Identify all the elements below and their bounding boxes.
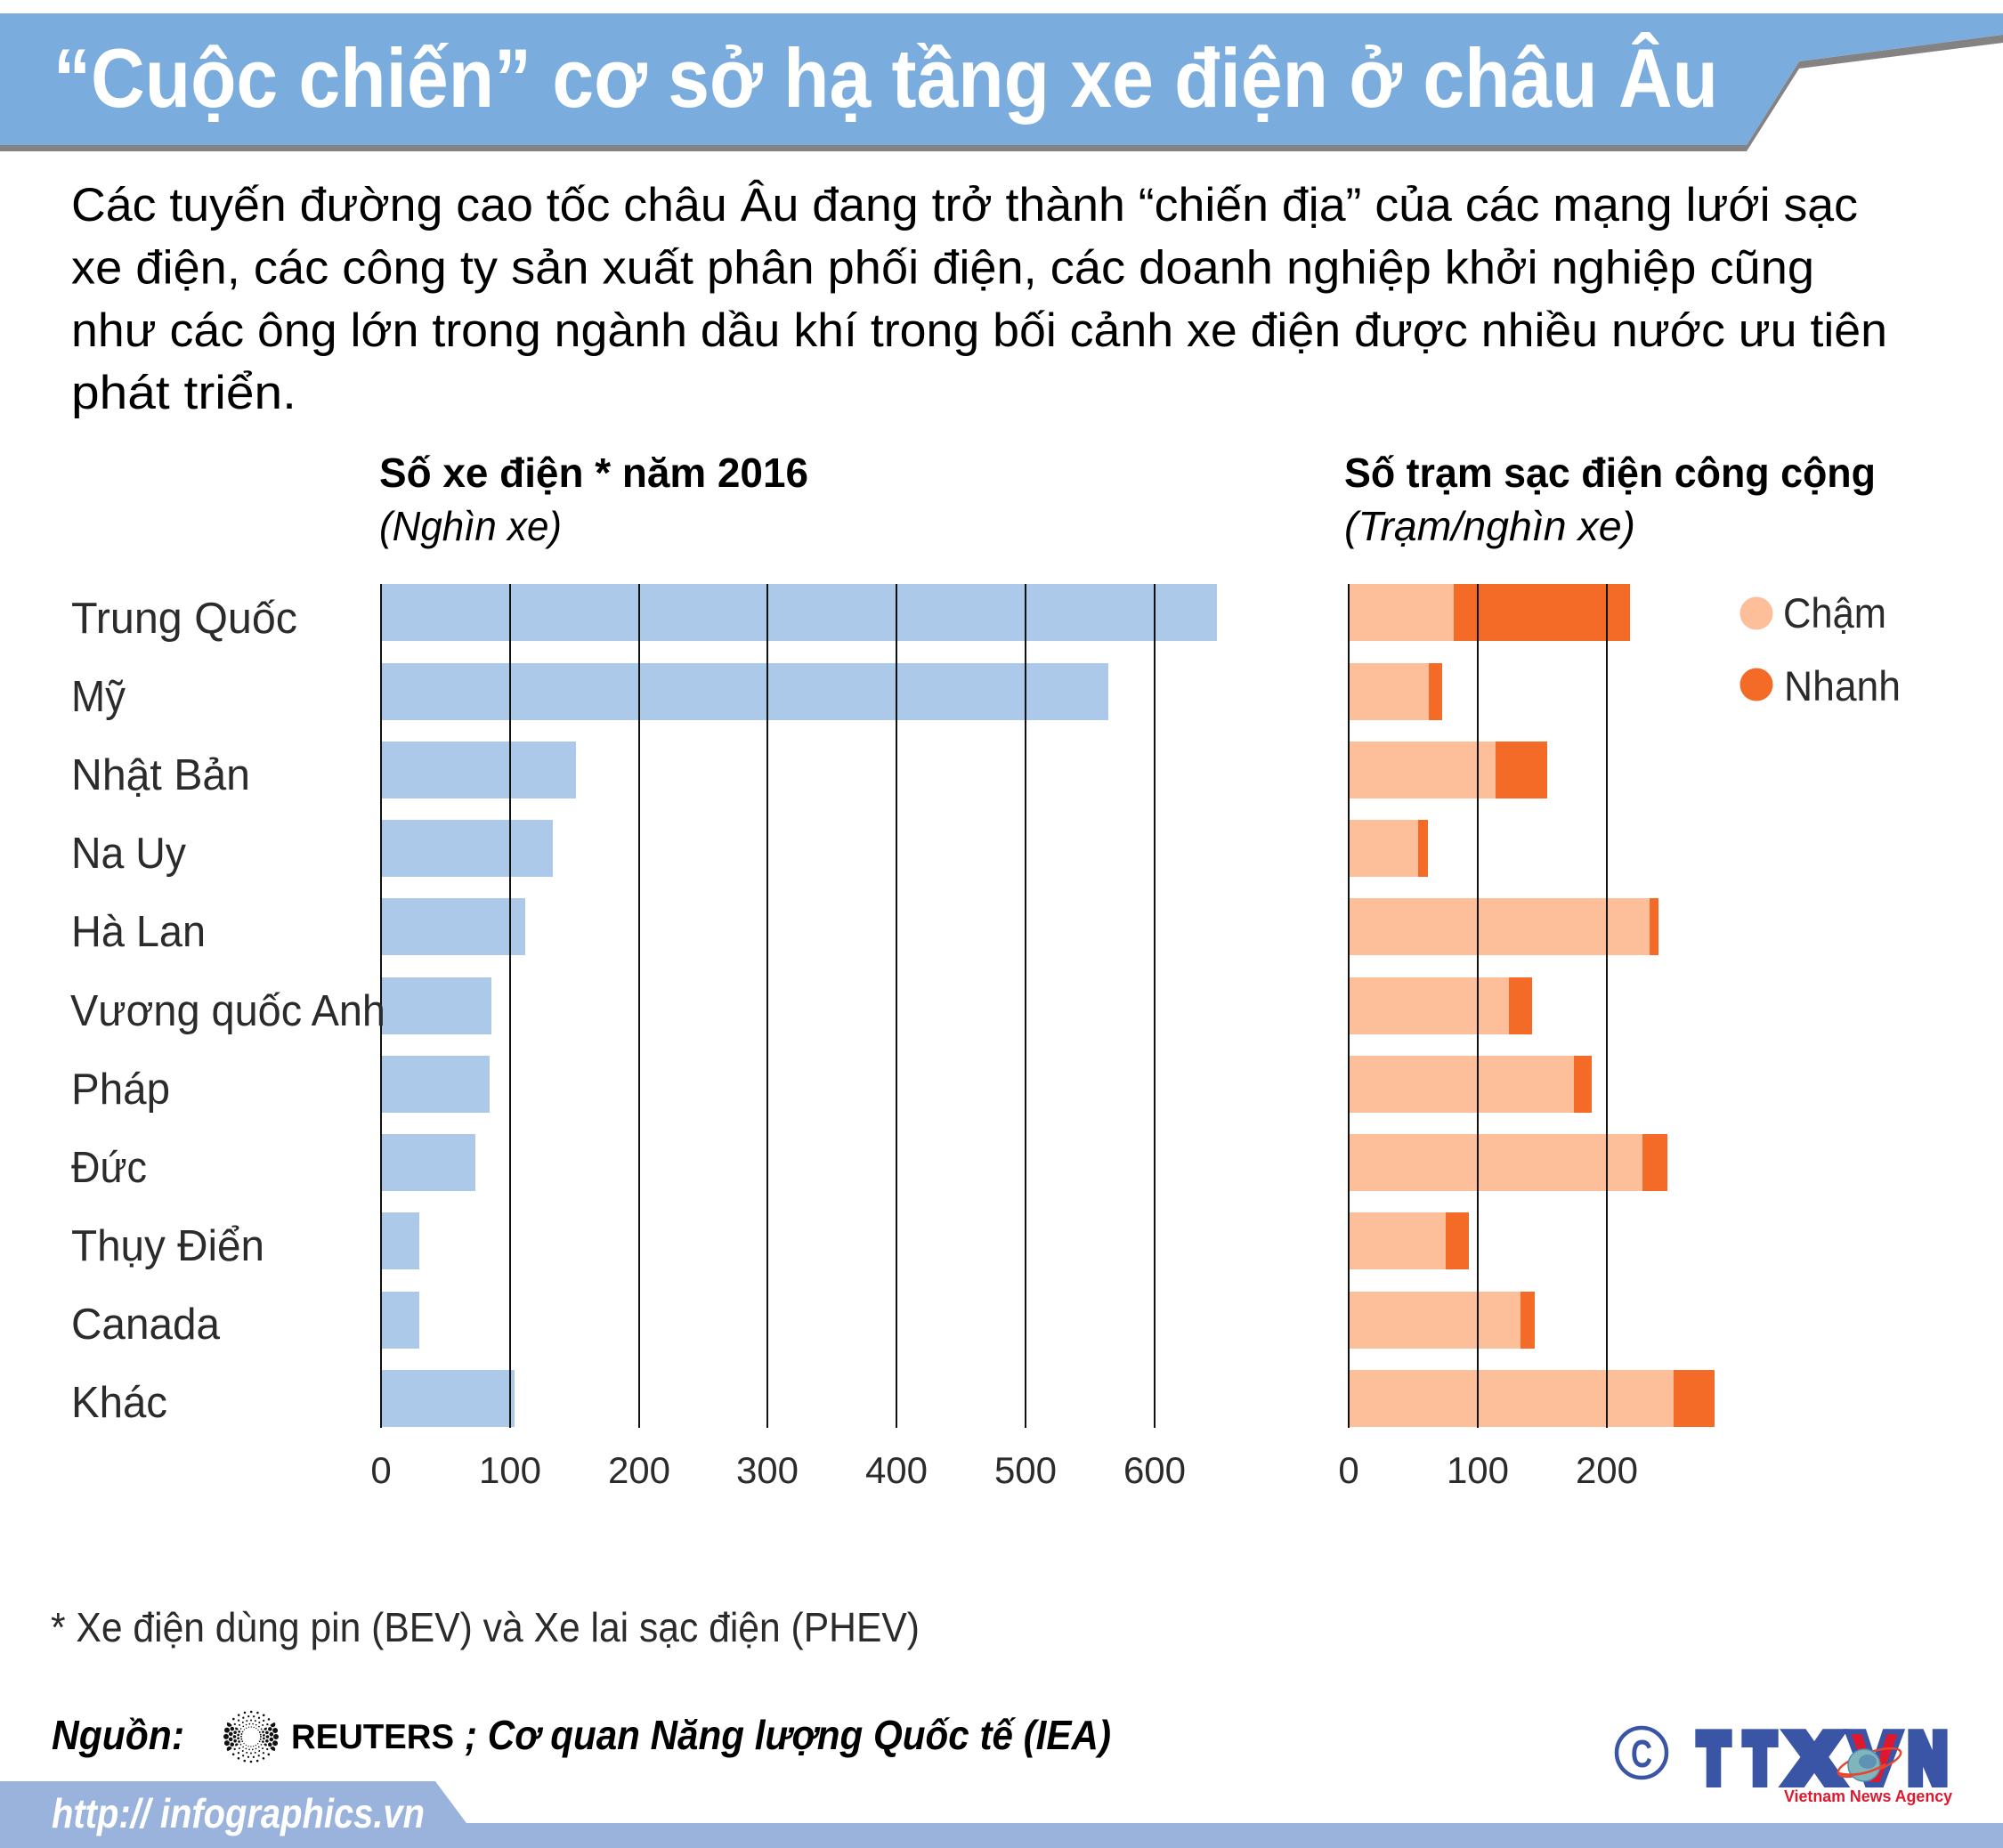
- country labels: Mỹ: [71, 673, 126, 721]
- country labels: Canada: [71, 1301, 221, 1349]
- right axis labels: 200: [1576, 1449, 1638, 1491]
- legend: Nhanh: [1784, 662, 1901, 709]
- stacked bar chart: public charging stations: [1338, 584, 1715, 1491]
- icon: Reuters dot logo: [226, 1712, 276, 1762]
- left chart heading: Số xe điện * năm 2016: [379, 450, 808, 496]
- country labels: Trung Quốc: [71, 595, 297, 643]
- left axis labels: [370, 1449, 1186, 1491]
- TTXVN logo: N: [1909, 1719, 1947, 1797]
- right axis labels: 100: [1447, 1449, 1509, 1491]
- intro paragraph: phát triển.: [71, 367, 296, 419]
- TTXVN logo: V: [1851, 1719, 1898, 1797]
- right axis labels: [1338, 1449, 1638, 1491]
- country labels: Hà Lan: [71, 908, 206, 956]
- right chart heading: Số trạm sạc điện công cộng: [1344, 450, 1876, 496]
- footnote: * Xe điện dùng pin (BEV) và Xe lai sạc điện (PHEV): [51, 1604, 920, 1650]
- title: “Cuộc chiến” cơ sở hạ tầng xe điện ở châu Âu: [53, 30, 1718, 125]
- left chart heading: [379, 450, 808, 549]
- TTXVN logo: T: [1699, 1719, 1729, 1797]
- left axis labels: 100: [479, 1449, 541, 1491]
- website url: http:// infographics.vn: [52, 1790, 425, 1836]
- left axis labels: 600: [1123, 1449, 1186, 1491]
- left axis labels: 300: [736, 1449, 799, 1491]
- country labels: [70, 595, 385, 1427]
- right chart heading: [1344, 450, 1876, 549]
- TTXVN logo: T: [1745, 1719, 1775, 1797]
- legend: Chậm: [1783, 589, 1886, 636]
- left axis labels: 400: [865, 1449, 928, 1491]
- left axis labels: 500: [994, 1449, 1057, 1491]
- intro paragraph: [71, 179, 1887, 419]
- left chart heading: (Nghìn xe): [379, 503, 562, 549]
- source line: ; Cơ quan Năng lượng Quốc tế (IEA): [465, 1712, 1111, 1758]
- country labels: Nhật Bản: [71, 751, 250, 799]
- country labels: Thụy Điển: [71, 1222, 264, 1270]
- intro paragraph: xe điện, các công ty sản xuất phân phối điện, các doanh nghiệp khởi nghiệp cũng: [71, 242, 1814, 294]
- country labels: Na Uy: [71, 830, 186, 878]
- TTXVN logo: Vietnam News Agency: [1784, 1787, 1952, 1805]
- country labels: Khác: [71, 1379, 167, 1427]
- icon: copyright mark: [1617, 1728, 1666, 1778]
- left axis labels: 200: [608, 1449, 670, 1491]
- icon: globe with orbit: [1835, 1743, 1904, 1782]
- source line: REUTERS: [291, 1718, 454, 1756]
- bar chart: electric vehicles 2016: [370, 584, 1217, 1491]
- intro paragraph: Các tuyến đường cao tốc châu Âu đang trở thành “chiến địa” của các mạng lưới sạc: [71, 179, 1858, 231]
- intro paragraph: như các ông lớn trong ngành dầu khí trong bối cảnh xe điện được nhiều nước ưu tiên: [71, 304, 1887, 357]
- country labels: Pháp: [71, 1066, 170, 1114]
- source line: Nguồn:: [52, 1712, 184, 1758]
- legend: [1739, 589, 1901, 709]
- right chart heading: (Trạm/nghìn xe): [1344, 503, 1635, 549]
- country labels: Đức: [71, 1144, 147, 1192]
- header banner: [0, 13, 2003, 151]
- left axis labels: 0: [370, 1449, 392, 1491]
- source line: [52, 1712, 1111, 1762]
- icon: copyright mark: C: [1631, 1732, 1652, 1776]
- country labels: Vương quốc Anh: [70, 987, 385, 1035]
- TTXVN logo: X: [1788, 1719, 1840, 1797]
- TTXVN logo: [1699, 1719, 1952, 1805]
- right axis labels: 0: [1338, 1449, 1359, 1491]
- footer band: [0, 1781, 2003, 1848]
